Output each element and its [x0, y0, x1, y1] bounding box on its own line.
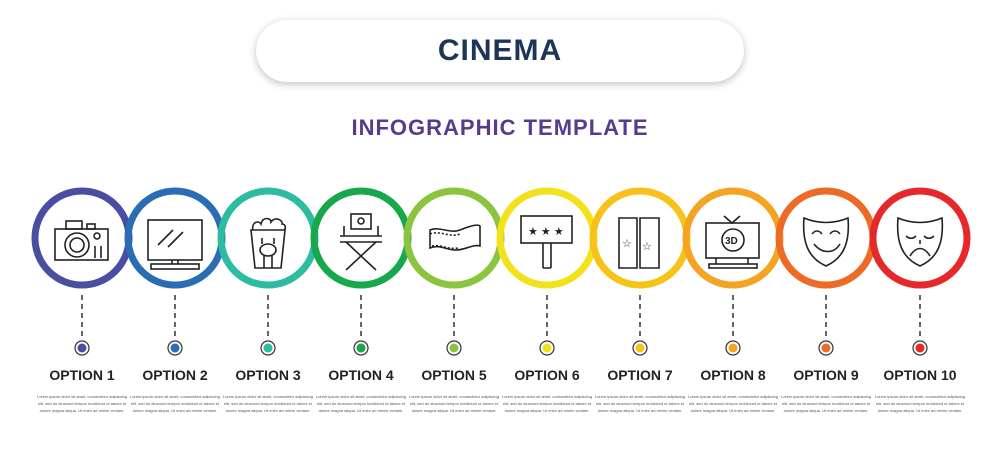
text: OPTION 6 — [514, 367, 580, 383]
text: dolore magna aliqua. Ut enim ad minim veniam. — [598, 408, 682, 413]
subtitle: INFOGRAPHIC TEMPLATE — [351, 115, 649, 140]
text: Lorem ipsum dolor sit amet, consectetur adipiscing — [223, 394, 313, 399]
text: elit, sed do eiusmod tempor incididunt ut labore et — [131, 401, 219, 406]
text: Lorem ipsum dolor sit amet, consectetur adipiscing — [37, 394, 127, 399]
3D tv — [706, 216, 759, 268]
happy mask — [804, 218, 848, 266]
text: dolore magna aliqua. Ut enim ad minim veniam. — [40, 408, 124, 413]
text: OPTION 1 — [49, 367, 115, 383]
billboard — [521, 216, 572, 268]
text: dolore magna aliqua. Ut enim ad minim veniam. — [226, 408, 310, 413]
text: elit, sed do eiusmod tempor incididunt ut labore et — [689, 401, 777, 406]
director chair — [340, 214, 382, 270]
text: Lorem ipsum dolor sit amet, consectetur adipiscing — [502, 394, 592, 399]
sad mask — [898, 218, 942, 266]
text: elit, sed do eiusmod tempor incididunt ut labore et — [410, 401, 498, 406]
text: dolore magna aliqua. Ut enim ad minim veniam. — [412, 408, 496, 413]
text: Lorem ipsum dolor sit amet, consectetur adipiscing — [130, 394, 220, 399]
3D tv: 3D — [725, 236, 738, 247]
camera — [55, 221, 108, 260]
text: OPTION 8 — [700, 367, 766, 383]
text: Lorem ipsum dolor sit amet, consectetur adipiscing — [688, 394, 778, 399]
text: elit, sed do eiusmod tempor incididunt ut labore et — [38, 401, 126, 406]
text: dolore magna aliqua. Ut enim ad minim veniam. — [691, 408, 775, 413]
text: elit, sed do eiusmod tempor incididunt ut labore et — [876, 401, 964, 406]
labels — [49, 367, 957, 383]
billboard: ★ ★ ★ — [528, 226, 564, 238]
text: OPTION 5 — [421, 367, 487, 383]
text: dolore magna aliqua. Ut enim ad minim veniam. — [784, 408, 868, 413]
title — [256, 20, 744, 82]
text: elit, sed do eiusmod tempor incididunt ut labore et — [224, 401, 312, 406]
tickets — [619, 218, 659, 268]
tickets: ☆ — [642, 241, 652, 253]
text: OPTION 4 — [328, 367, 394, 383]
descriptions — [37, 394, 965, 413]
film strip — [430, 225, 480, 250]
text: elit, sed do eiusmod tempor incididunt ut labore et — [317, 401, 405, 406]
title: CINEMA — [438, 34, 562, 67]
text: OPTION 7 — [607, 367, 673, 383]
text: Lorem ipsum dolor sit amet, consectetur adipiscing — [316, 394, 406, 399]
text: Lorem ipsum dolor sit amet, consectetur adipiscing — [595, 394, 685, 399]
text: elit, sed do eiusmod tempor incididunt ut labore et — [596, 401, 684, 406]
popcorn — [251, 218, 285, 268]
text: elit, sed do eiusmod tempor incididunt ut labore et — [503, 401, 591, 406]
text: OPTION 9 — [793, 367, 859, 383]
text: dolore magna aliqua. Ut enim ad minim veniam. — [878, 408, 962, 413]
text: dolore magna aliqua. Ut enim ad minim veniam. — [505, 408, 589, 413]
text: elit, sed do eiusmod tempor incididunt ut labore et — [782, 401, 870, 406]
text: dolore magna aliqua. Ut enim ad minim veniam. — [319, 408, 403, 413]
text: Lorem ipsum dolor sit amet, consectetur adipiscing — [781, 394, 871, 399]
text: Lorem ipsum dolor sit amet, consectetur adipiscing — [875, 394, 965, 399]
text: Lorem ipsum dolor sit amet, consectetur adipiscing — [409, 394, 499, 399]
text: dolore magna aliqua. Ut enim ad minim veniam. — [133, 408, 217, 413]
text: OPTION 2 — [142, 367, 208, 383]
tickets: ☆ — [622, 238, 632, 250]
text: OPTION 10 — [883, 367, 957, 383]
text: OPTION 3 — [235, 367, 301, 383]
monitor — [148, 220, 202, 269]
